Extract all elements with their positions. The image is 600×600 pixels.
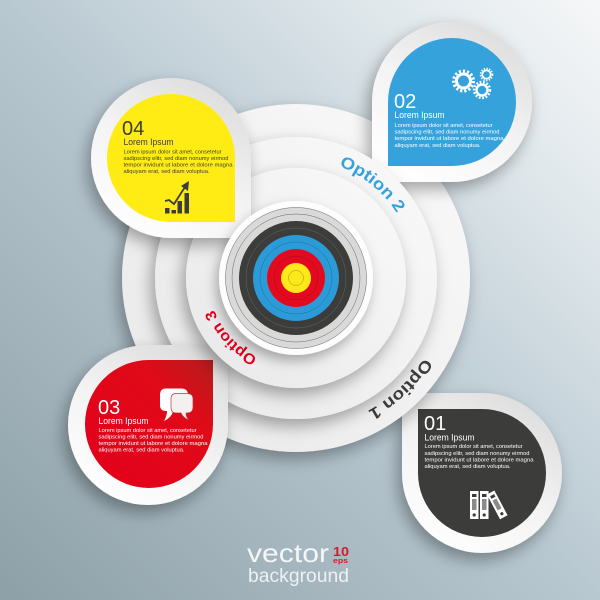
- icon: gears: [454, 68, 492, 98]
- panel: 01 dark bubble: [402, 393, 562, 553]
- panel: 03 red bubble: tempor invidunt ut labore et dolore magna: [98, 441, 208, 447]
- logo: vector 10 eps background: background: [248, 565, 349, 587]
- panel: 02 blue bubble: Lorem Ipsum: [394, 110, 444, 120]
- panel: 04 yellow bubble: Lorem ipsum dolor sit amet, consetetur: [124, 150, 222, 156]
- panel: 02 blue bubble: [372, 22, 532, 182]
- disk: outer ring with Option 1: Option 1: [368, 360, 431, 419]
- panel: 03 red bubble: Lorem ipsum dolor sit amet, consetetur: [98, 428, 197, 434]
- panel: 03 red bubble: [68, 345, 228, 505]
- panel: 01 dark bubble: 01: [424, 413, 446, 435]
- target: [219, 201, 373, 355]
- panel: 04 yellow bubble: tempor invidunt ut labore et dolore magna: [124, 162, 233, 168]
- disk: third ring with Option 3: Option 3: [206, 311, 256, 364]
- logo: vector 10 eps background: [247, 538, 349, 587]
- disk: second ring with Option 2: [142, 134, 443, 436]
- panel: 04 yellow bubble: Lorem Ipsum: [124, 137, 174, 147]
- panel: 02 blue bubble: aliquyam erat, sed diam voluptua.: [394, 143, 480, 149]
- panel: 01 dark bubble: tempor invidunt ut labore et dolore magna: [424, 458, 534, 464]
- panel: 03 red bubble: 03: [98, 397, 120, 419]
- panel: 03 red bubble: Lorem Ipsum: [98, 416, 148, 426]
- panel: 01 dark bubble: Lorem ipsum dolor sit amet, consetetur: [424, 444, 523, 450]
- panel: 02 blue bubble: tempor invidunt ut labore et dolore magna: [394, 136, 504, 142]
- logo: vector 10 eps background: eps: [333, 556, 348, 565]
- panel: 03 red bubble: aliquyam erat, sed diam voluptua.: [98, 448, 184, 454]
- panel: 02 blue bubble: Lorem ipsum dolor sit amet, consetetur: [394, 123, 493, 129]
- icon: growth chart: [165, 181, 189, 214]
- disk: second ring with Option 2: Option 2: [341, 158, 404, 212]
- panel: 03 red bubble: sadipscing elitr, sed diam nonumy eirmod: [98, 434, 204, 440]
- panel: 02 blue bubble: 02: [394, 91, 416, 113]
- panel: 04 yellow bubble: 04: [122, 118, 144, 140]
- panel: 04 yellow bubble: aliquyam erat, sed diam voluptua.: [124, 169, 210, 175]
- panel: 02 blue bubble: sadipscing elitr, sed diam nonumy eirmod: [394, 130, 500, 136]
- panel: 04 yellow bubble: [91, 78, 251, 238]
- disk: third ring with Option 3: [172, 165, 412, 404]
- icon: speech bubbles: [160, 388, 193, 421]
- logo: vector 10 eps background: vector: [247, 538, 329, 568]
- panel: 01 dark bubble: Lorem Ipsum: [424, 432, 474, 442]
- icon: binders: [470, 491, 508, 519]
- logo: vector 10 eps background: 10: [333, 544, 349, 559]
- panel: 01 dark bubble: sadipscing elitr, sed diam nonumy eirmod: [424, 451, 530, 457]
- panel: 01 dark bubble: aliquyam erat, sed diam voluptua.: [424, 464, 510, 470]
- panel: 04 yellow bubble: sadipscing elitr, sed diam nonumy eirmod: [124, 156, 229, 162]
